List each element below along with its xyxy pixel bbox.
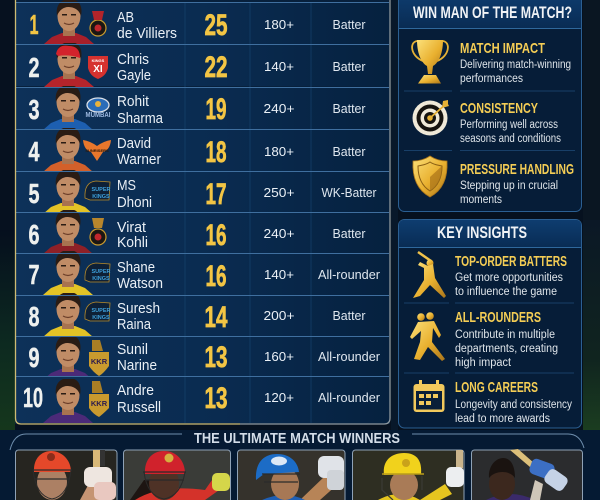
- panel: key insights: [398, 220, 582, 428]
- panel heading: KEY INSIGHTS: [437, 224, 527, 242]
- all-rounders text: high impact: [455, 357, 512, 369]
- row 4: David Warner: 180+: [264, 144, 294, 159]
- pressure handling text: moments: [460, 194, 502, 206]
- pressure handling text: [460, 161, 574, 206]
- row 3: Rohit Sharma: [16, 85, 389, 130]
- row 3: Rohit Sharma: 240+: [264, 101, 294, 116]
- photo: Rohit Sharma: [238, 450, 345, 500]
- row 10: Andre Russell: All-rounder: [318, 390, 381, 405]
- row 9: Sunil Narine: Sunil: [117, 341, 148, 358]
- row 9: Sunil Narine: 9: [28, 342, 40, 373]
- row 3: Rohit Sharma: 19: [206, 93, 226, 126]
- row 9: Sunil Narine: 160+: [264, 349, 294, 364]
- match impact text: Delivering match-winning: [460, 59, 571, 71]
- row 8: Suresh Raina: 8: [28, 301, 40, 332]
- panel heading: [399, 0, 581, 28]
- all-rounders text: departments, creating: [455, 343, 558, 355]
- row 5: MS Dhoni: Dhoni: [117, 194, 152, 211]
- row 4: David Warner: SUNRISERS: [85, 148, 109, 153]
- match impact text: [460, 40, 571, 85]
- consistency text: [460, 100, 561, 145]
- panel: win man of the match: [398, 0, 582, 212]
- top-order batters text: to influence the game: [455, 286, 557, 298]
- row 10: Andre Russell: Russell: [117, 399, 161, 416]
- pressure handling text: Stepping up in crucial: [460, 180, 558, 192]
- row 7: Shane Watson: Watson: [117, 275, 163, 292]
- row 5: MS Dhoni: SUPER: [92, 187, 111, 193]
- row 7: Shane Watson: 7: [28, 259, 40, 290]
- row 10: Andre Russell: 120+: [264, 390, 294, 405]
- row 8: Suresh Raina: Suresh: [117, 300, 160, 317]
- row 2: Chris Gayle: XI: [93, 64, 103, 75]
- row 1: AB de Villiers: 180+: [264, 17, 294, 32]
- photo: Andre Russell: [472, 449, 582, 500]
- row 7: Shane Watson: KINGS: [92, 276, 110, 282]
- row 10: Andre Russell: KKR: [91, 399, 108, 408]
- row 7: Shane Watson: 16: [206, 260, 226, 293]
- row 2: Chris Gayle: KINGS: [92, 58, 105, 63]
- panel heading: [399, 220, 581, 248]
- row 5: MS Dhoni: MS: [117, 177, 136, 194]
- row 2: Chris Gayle: Chris: [117, 51, 149, 68]
- row 4: David Warner: [16, 127, 389, 172]
- icon: trophy: [412, 40, 448, 84]
- row 3: Rohit Sharma: Rohit: [117, 93, 150, 110]
- row 3: Rohit Sharma: Batter: [332, 101, 366, 116]
- row 6: Virat Kohli: [16, 209, 389, 254]
- section: the ultimate match winners: [10, 431, 584, 500]
- row 3: Rohit Sharma: MUMBAI: [86, 110, 110, 119]
- icon: batter: [413, 252, 446, 298]
- ranking table: [15, 0, 390, 424]
- row 8: Suresh Raina: Raina: [117, 316, 152, 333]
- long careers text: lead to more awards: [455, 413, 550, 425]
- row 3: Rohit Sharma: Sharma: [117, 110, 164, 127]
- row 5: MS Dhoni: KINGS: [92, 194, 110, 200]
- row 10: Andre Russell: 13: [204, 382, 228, 415]
- row 8: Suresh Raina: Batter: [332, 308, 366, 323]
- long careers text: Longevity and consistency: [455, 399, 572, 411]
- long careers text: LONG CAREERS: [455, 379, 538, 396]
- row 5: MS Dhoni: 17: [206, 178, 226, 211]
- photo: MS Dhoni: [352, 450, 464, 500]
- row 1: AB de Villiers: [16, 0, 389, 44]
- row 9: Sunil Narine: All-rounder: [318, 349, 381, 364]
- icon: all-rounders: [410, 312, 445, 361]
- row 1: AB de Villiers: 1: [30, 9, 38, 40]
- row 6: Virat Kohli: 16: [206, 219, 226, 252]
- all-rounders text: [455, 309, 558, 369]
- row 10: Andre Russell: 10: [23, 382, 43, 413]
- row 10: Andre Russell: Andre: [117, 382, 154, 399]
- row 6: Virat Kohli: Batter: [332, 226, 366, 241]
- row 9: Sunil Narine: 13: [204, 341, 228, 374]
- row 5: MS Dhoni: [16, 169, 389, 214]
- row 7: Shane Watson: All-rounder: [318, 267, 381, 282]
- row 2: Chris Gayle: Gayle: [117, 67, 151, 84]
- row 3: Rohit Sharma: 3: [28, 94, 40, 125]
- row 2: Chris Gayle: 22: [204, 51, 228, 84]
- all-rounders text: Contribute in multiple: [455, 329, 555, 341]
- icon: target: [412, 100, 449, 136]
- row 8: Suresh Raina: 200+: [264, 308, 294, 323]
- top-order batters text: Get more opportunities: [455, 272, 563, 284]
- section heading: THE ULTIMATE MATCH WINNERS: [194, 431, 400, 447]
- row 2: Chris Gayle: 140+: [264, 59, 294, 74]
- match impact text: MATCH IMPACT: [460, 40, 545, 57]
- row 6: Virat Kohli: 6: [28, 219, 40, 250]
- row 6: Virat Kohli: Kohli: [117, 234, 148, 251]
- match impact text: performances: [460, 73, 523, 85]
- top-order batters text: [455, 253, 567, 298]
- row 1: AB de Villiers: AB: [117, 9, 134, 26]
- row 5: MS Dhoni: WK-Batter: [322, 185, 377, 200]
- row 4: David Warner: David: [117, 135, 151, 152]
- consistency text: seasons and conditions: [460, 133, 561, 145]
- row 2: Chris Gayle: 2: [28, 52, 40, 83]
- row 8: Suresh Raina: [16, 292, 389, 337]
- icon: calendar: [414, 380, 444, 412]
- row 10: Andre Russell: [16, 377, 389, 423]
- photo: Chris Gayle: [124, 450, 230, 500]
- row 8: Suresh Raina: 14: [204, 301, 228, 334]
- row 4: David Warner: 18: [206, 136, 226, 169]
- photo: AB de Villiers: [16, 450, 117, 500]
- row 4: David Warner: Warner: [117, 151, 161, 168]
- row 6: Virat Kohli: Virat: [117, 219, 147, 236]
- row 1: AB de Villiers: de Villiers: [117, 25, 177, 42]
- row 9: Sunil Narine: Narine: [117, 357, 157, 374]
- icon: shield: [413, 156, 447, 197]
- row 5: MS Dhoni: 250+: [264, 185, 294, 200]
- row 8: Suresh Raina: SUPER: [92, 308, 111, 314]
- row 9: Sunil Narine: KKR: [91, 357, 108, 366]
- row 2: Chris Gayle: [16, 42, 389, 87]
- row 7: Shane Watson: SUPER: [92, 269, 111, 275]
- row 1: AB de Villiers: 25: [204, 9, 228, 42]
- consistency text: Performing well across: [460, 119, 558, 131]
- long careers text: [455, 379, 572, 425]
- row 7: Shane Watson: Shane: [117, 259, 155, 276]
- row 8: Suresh Raina: KINGS: [92, 315, 110, 321]
- all-rounders text: ALL-ROUNDERS: [455, 309, 541, 326]
- row 4: David Warner: Batter: [332, 144, 366, 159]
- row 9: Sunil Narine: [16, 335, 389, 380]
- row 6: Virat Kohli: 240+: [264, 226, 294, 241]
- row 7: Shane Watson: 140+: [264, 267, 294, 282]
- row 7: Shane Watson: [16, 250, 389, 295]
- consistency text: CONSISTENCY: [460, 100, 538, 117]
- row 2: Chris Gayle: Batter: [332, 59, 366, 74]
- row 1: AB de Villiers: Batter: [332, 17, 366, 32]
- row 4: David Warner: 4: [28, 136, 40, 167]
- row 5: MS Dhoni: 5: [28, 178, 40, 209]
